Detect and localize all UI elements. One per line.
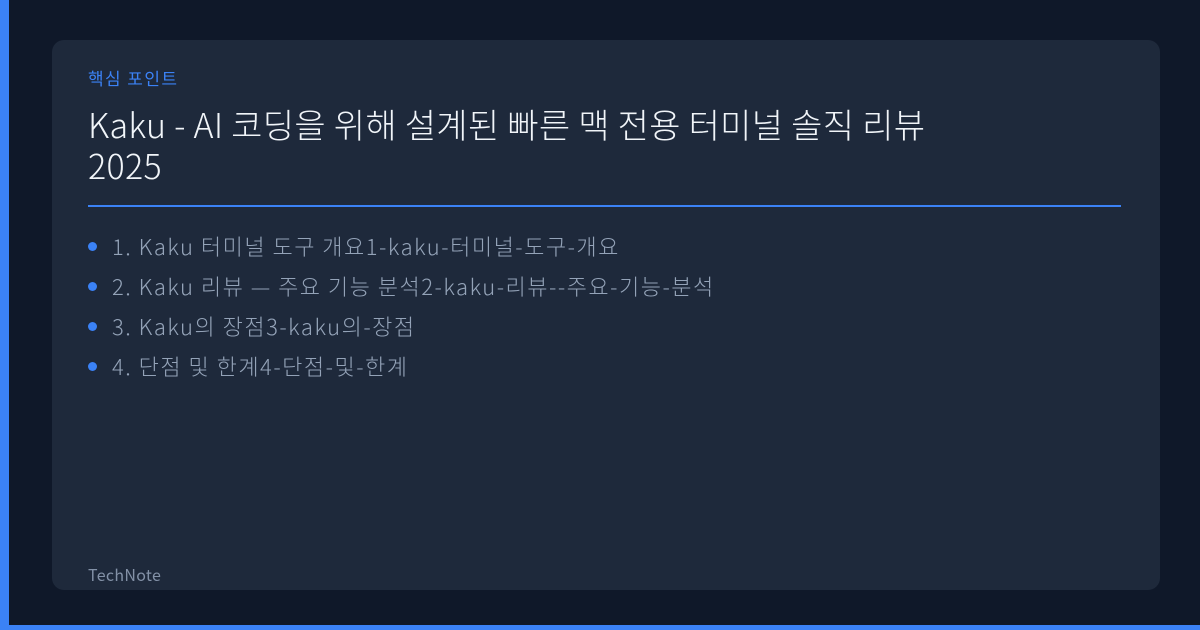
divider line [88,205,1121,207]
bullet 4: 4. 단점 및 한계4-단점-및-한계 [112,350,409,382]
accent bar bottom [0,625,1200,630]
title: Kaku - AI 코딩을 위해 설계된 빠른 맥 전용 터미널 솔직 리뷰 2025 [88,99,925,189]
bullet 3: 3. Kaku의 장점3-kaku의-장점 [112,310,416,342]
footer brand: TechNote [88,562,161,586]
accent bar left [0,0,9,630]
bullet 2: 2. Kaku 리뷰 — 주요 기능 분석2-kaku-리뷰--주요-기능-분석 [112,270,715,302]
bullet 1: 1. Kaku 터미널 도구 개요1-kaku-터미널-도구-개요 [112,230,620,262]
bullet list [88,230,715,382]
kicker label: 핵심 포인트 [88,65,178,90]
